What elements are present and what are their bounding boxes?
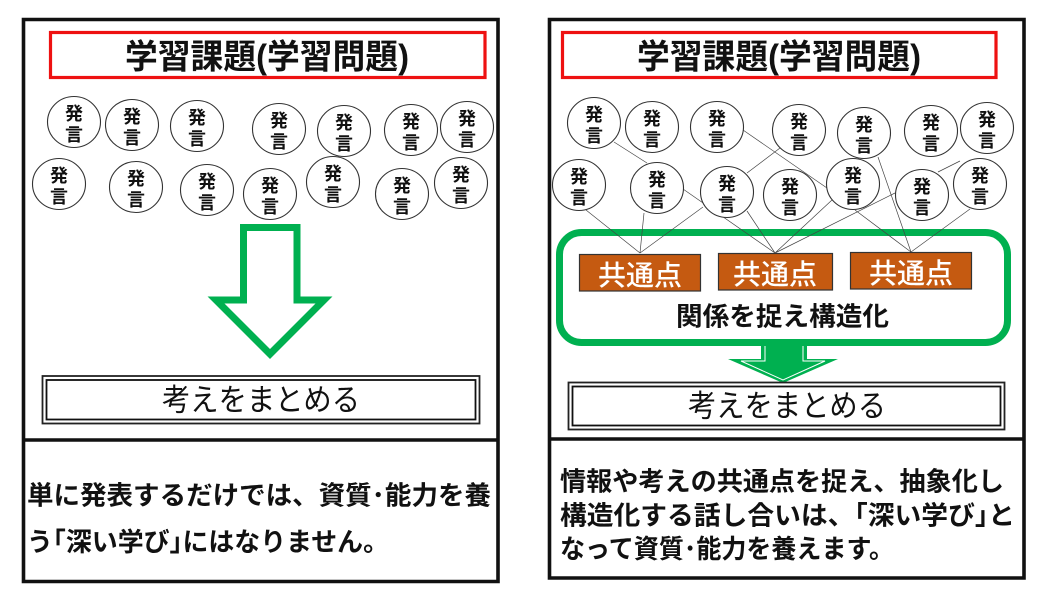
speech bubbles: right: 言 — [844, 187, 862, 207]
panel: left — [24, 20, 498, 582]
speech bubbles: right: 発 — [708, 109, 726, 129]
label: structuring relationships: 関係を捉え構造化 — [676, 302, 889, 332]
speech bubbles: left: 発 — [50, 166, 68, 186]
speech bubbles: left: 言 — [127, 190, 145, 210]
speech bubbles: right: 言 — [971, 187, 989, 207]
summary box: right: 考えをまとめる — [688, 389, 886, 424]
label: common point 2 — [718, 254, 832, 290]
text block: right note — [560, 468, 1015, 565]
speech bubbles: left — [32, 96, 494, 220]
heading box: left learning task: 学習課題(学習問題) — [125, 38, 409, 76]
label: common point 2: 共通点 — [733, 259, 817, 290]
speech bubbles: left: 言 — [393, 197, 411, 217]
speech bubbles: left: 言 — [50, 187, 68, 207]
speech bubbles: right: 言 — [922, 134, 940, 154]
text block: left note: う｢深い学び｣にはなりません。 — [27, 528, 389, 558]
text block: right note: 情報や考えの共通点を捉え、抽象化し — [560, 468, 1004, 497]
summary box: left: 考えをまとめる — [162, 383, 360, 418]
heading box: left learning task — [50, 32, 485, 78]
speech bubbles: left: 発 — [65, 104, 83, 124]
speech bubbles: right: 言 — [708, 130, 726, 150]
heading box: right learning task: 学習課題(学習問題) — [637, 38, 921, 76]
speech bubbles: left: 発 — [198, 172, 216, 192]
speech bubbles: left: 言 — [335, 134, 353, 154]
connector lines — [586, 130, 970, 253]
text block: right note: なって資質･能力を養えます。 — [560, 535, 894, 565]
speech bubbles: right: 言 — [978, 131, 996, 151]
structure box: green rounded frame — [560, 232, 1008, 342]
speech bubbles: left: 言 — [324, 185, 342, 205]
speech bubbles: right: 発 — [790, 112, 808, 132]
heading box: right learning task — [562, 32, 996, 78]
speech bubbles: left: 言 — [452, 186, 470, 206]
label: common point 1 — [580, 254, 700, 291]
speech bubbles: left: 言 — [402, 133, 420, 153]
speech bubbles: right: 発 — [643, 109, 661, 129]
text block: right note: 構造化する話し合いは、｢深い学び｣と — [560, 502, 1015, 531]
text block: left note — [27, 482, 491, 558]
speech bubbles: right: 発 — [855, 115, 873, 135]
speech bubbles: left: 言 — [261, 197, 279, 217]
label: common point 3 — [850, 252, 972, 289]
label: common point 1: 共通点 — [598, 260, 682, 291]
text block: left note: 単に発表するだけでは、資質･能力を養 — [27, 482, 491, 511]
speech bubbles: left: 発 — [324, 164, 342, 184]
speech bubbles: right: 発 — [648, 170, 666, 190]
speech bubbles: left: 発 — [123, 107, 141, 127]
speech bubbles: right: 発 — [570, 167, 588, 187]
arrow: right filled down arrow — [728, 346, 838, 383]
speech bubbles: right: 言 — [913, 198, 931, 218]
speech bubbles: right — [552, 98, 1014, 220]
speech bubbles: right: 発 — [913, 177, 931, 197]
speech bubbles: left: 発 — [335, 113, 353, 133]
speech bubbles: left: 発 — [402, 112, 420, 132]
speech bubbles: left: 言 — [458, 130, 476, 150]
speech bubbles: right: 言 — [855, 136, 873, 156]
panel frame: left — [24, 20, 498, 582]
speech bubbles: right: 言 — [648, 191, 666, 211]
speech bubbles: left: 発 — [270, 111, 288, 131]
speech bubbles: right: 言 — [570, 188, 588, 208]
speech bubbles: right: 発 — [922, 113, 940, 133]
speech bubbles: left: 言 — [270, 132, 288, 152]
summary box: right — [568, 382, 1004, 430]
speech bubbles: right: 言 — [585, 126, 603, 146]
speech bubbles: right: 言 — [643, 130, 661, 150]
speech bubbles: right: 発 — [971, 166, 989, 186]
speech bubbles: left: 発 — [458, 109, 476, 129]
summary box: left — [42, 376, 480, 424]
speech bubbles: left: 発 — [393, 176, 411, 196]
speech bubbles: right: 発 — [781, 177, 799, 197]
speech bubbles: right: 発 — [978, 110, 996, 130]
speech bubbles: left: 言 — [65, 125, 83, 145]
speech bubbles: right: 発 — [844, 166, 862, 186]
speech bubbles: left: 言 — [188, 129, 206, 149]
speech bubbles: right: 言 — [718, 195, 736, 215]
speech bubbles: left: 言 — [123, 128, 141, 148]
panel: right — [550, 20, 1024, 578]
speech bubbles: right: 発 — [585, 105, 603, 125]
speech bubbles: right: 発 — [718, 174, 736, 194]
panel frame: right — [550, 20, 1024, 578]
speech bubbles: right: 言 — [781, 198, 799, 218]
speech bubbles: right: 言 — [790, 133, 808, 153]
speech bubbles: left: 言 — [198, 193, 216, 213]
speech bubbles: left: 発 — [261, 176, 279, 196]
arrow: left outlined down arrow — [216, 228, 324, 354]
speech bubbles: left: 発 — [452, 165, 470, 185]
speech bubbles: left: 発 — [188, 108, 206, 128]
label: common point 3: 共通点 — [869, 258, 953, 289]
speech bubbles: left: 発 — [127, 169, 145, 189]
